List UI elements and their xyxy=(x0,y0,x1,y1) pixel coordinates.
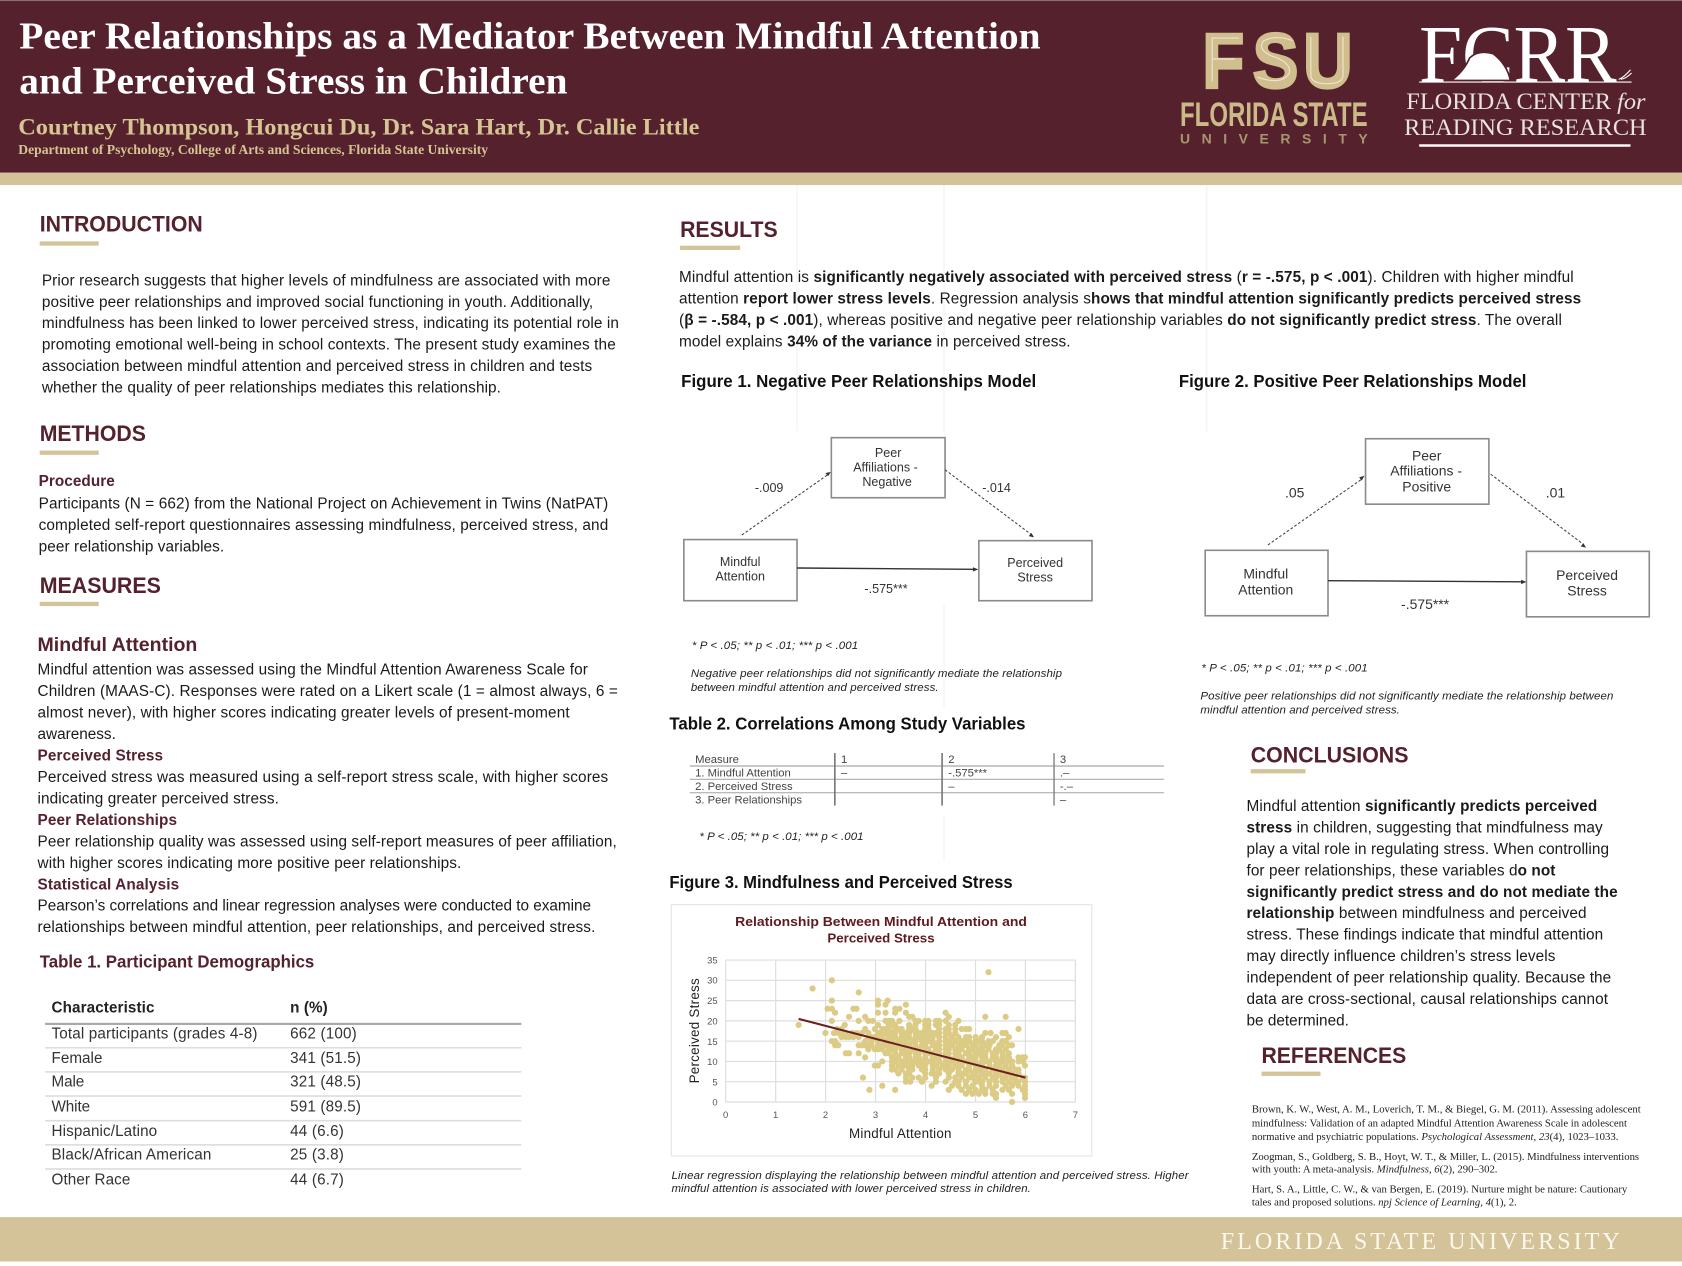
y axis ticks xyxy=(707,954,718,1107)
table 1: participant demographics: Other Race xyxy=(51,1171,130,1188)
box: peer affiliations positive: Affiliations - xyxy=(1390,463,1462,479)
box: mindful attention xyxy=(684,540,797,601)
x axis ticks: 2 xyxy=(823,1109,828,1120)
mindful attention text: almost never), with higher scores indicating greater levels of present-moment xyxy=(38,705,570,722)
table 2: correlations: -.– xyxy=(1060,781,1074,793)
logo: FCRR: FCRR xyxy=(1419,9,1617,100)
logo: FCRR: FLORIDA CENTER for xyxy=(1406,89,1646,115)
introduction text: mindfulness has been linked to lower perceived stress, indicating its potential role in xyxy=(42,315,619,332)
figure 3 caption: mindful attention is associated with lower perceived stress in children. xyxy=(672,1183,1031,1195)
figure 1 caption: between mindful attention and perceived stress. xyxy=(691,682,939,694)
logo: FSU: FLORIDA STATE xyxy=(1180,96,1368,134)
table 1: participant demographics: Hispanic/Latino xyxy=(51,1123,157,1140)
path labels: -.575*** xyxy=(1401,596,1450,612)
table 2: correlations: – xyxy=(841,768,848,780)
table 2: correlations: 3 xyxy=(1060,754,1066,766)
subheading: mindful attention: Mindful Attention xyxy=(38,635,197,656)
reference list: normative and psychiatric populations. Psychological Assessment, 23(4), 1023–1033. xyxy=(1252,1131,1618,1143)
box: mindful attention: Mindful xyxy=(1243,566,1288,582)
table 1: participant demographics: Male xyxy=(51,1074,84,1091)
figure 3 heading: Figure 3. Mindfulness and Perceived Stress xyxy=(669,872,1013,892)
y axis ticks: 35 xyxy=(707,954,718,965)
figure 3 caption xyxy=(672,1170,1190,1195)
table 2: correlations xyxy=(690,753,1164,806)
arrow: mindful to stress xyxy=(1328,580,1526,584)
table 1: participant demographics: 341 (51.5) xyxy=(290,1050,361,1067)
chart title xyxy=(735,914,1027,945)
figure 1 caption xyxy=(691,668,1063,694)
conclusions text: may directly influence children’s stress levels xyxy=(1246,948,1556,965)
figure 3 caption: Linear regression displaying the relationship between mindful attention and perceived stress. Higher xyxy=(672,1170,1190,1182)
box: mindful attention: Attention xyxy=(1238,581,1293,597)
reference list: tales and proposed solutions. npj Science of Learning, 4(1), 2. xyxy=(1252,1197,1517,1209)
table 1: participant demographics: 44 (6.6) xyxy=(290,1123,344,1140)
figure 2: positive peer relationships model xyxy=(1179,371,1649,716)
box: perceived stress xyxy=(979,541,1092,601)
reference list: Zoogman, S., Goldberg, S. B., Hoyt, W. T., & Miller, L. (2015). Mindfulness interventions xyxy=(1252,1151,1639,1163)
table 2: correlations: 2 xyxy=(948,754,955,766)
x axis ticks xyxy=(723,1109,1078,1120)
mindful attention text: Mindful attention was assessed using the Mindful Attention Awareness Scale for xyxy=(38,662,588,679)
table 2: correlations: 2. Perceived Stress xyxy=(695,781,793,793)
box: perceived stress: Perceived xyxy=(1556,567,1618,583)
y axis ticks: 5 xyxy=(712,1077,718,1088)
perceived stress text: Perceived stress was measured using a self-report stress scale, with higher scores xyxy=(38,769,609,786)
title: Peer Relationships as a Mediator Between Mindful Attention xyxy=(19,16,1041,57)
panel: references xyxy=(1252,1043,1641,1209)
table 2 significance note: * P < .05; ** p < .01; *** p < .001 xyxy=(699,831,864,843)
table 1: participant demographics: n (%) xyxy=(290,1000,328,1017)
box: peer affiliations positive: Peer xyxy=(1412,448,1442,464)
scatter points xyxy=(799,972,1025,1102)
conclusions text: significantly predict stress and do not mediate the xyxy=(1246,884,1618,901)
x axis ticks: 5 xyxy=(973,1109,978,1120)
introduction text: whether the quality of peer relationships mediates this relationship. xyxy=(41,380,501,397)
x axis ticks: 6 xyxy=(1023,1109,1028,1120)
results text: model explains 34% of the variance in perceived stress. xyxy=(679,333,1071,350)
table 2: correlations: – xyxy=(1060,794,1067,806)
table 1: participant demographics: 591 (89.5) xyxy=(290,1098,361,1115)
table 2: correlations: .– xyxy=(1060,768,1070,780)
procedure text: completed self-report questionnaires assessing mindfulness, perceived stress, and xyxy=(39,517,608,534)
path labels xyxy=(755,481,1011,596)
path labels: -.009 xyxy=(755,481,783,495)
statistical analysis text: relationships between mindful attention, peer relationships, and perceived stress. xyxy=(38,919,595,936)
panel: measures xyxy=(37,573,618,936)
panel: results xyxy=(679,217,1581,350)
table 1: participant demographics: 662 (100) xyxy=(290,1025,357,1042)
box: mindful attention: Attention xyxy=(715,569,765,583)
box: peer affiliations positive: Positive xyxy=(1402,478,1451,494)
introduction text: Prior research suggests that higher levels of mindfulness are associated with more xyxy=(42,272,610,289)
table 1: participant demographics: Characteristic xyxy=(51,1000,155,1017)
table 1: participant demographics: 321 (48.5) xyxy=(290,1074,361,1091)
box: peer affiliations negative xyxy=(831,438,945,498)
subheading: perceived stress: Perceived Stress xyxy=(38,748,163,765)
figure 3: scatter chart xyxy=(671,905,1092,1156)
panel: methods xyxy=(39,421,608,555)
panel: introduction xyxy=(40,212,619,397)
table 1: participant demographics: Black/African American xyxy=(51,1147,211,1164)
chart title: Perceived Stress xyxy=(827,930,935,945)
title: and Perceived Stress in Children xyxy=(19,61,568,102)
results text: Mindful attention is significantly negatively associated with perceived stress (r = -.575, p < .001). Children with higher mindful xyxy=(679,269,1574,286)
table 1: participant demographics: Female xyxy=(51,1050,102,1067)
box: perceived stress: Stress xyxy=(1017,570,1053,584)
introduction text: positive peer relationships and improved social functioning in youth. Additionally, xyxy=(42,294,593,311)
authors: Courtney Thompson, Hongcui Du, Dr. Sara Hart, Dr. Callie Little xyxy=(18,115,699,141)
x axis ticks: 1 xyxy=(773,1109,778,1120)
results text: attention report lower stress levels. Regression analysis shows that mindful attention significantly predicts perceived stress xyxy=(679,291,1581,308)
panel: conclusions xyxy=(1246,743,1618,1030)
arrow: peer to stress xyxy=(1491,474,1586,548)
conclusions text: play a vital role in regulating stress. When controlling xyxy=(1246,841,1609,858)
path labels: .05 xyxy=(1285,485,1305,501)
y axis ticks: 20 xyxy=(707,1015,718,1026)
arrow: mindful to peer xyxy=(742,472,831,535)
table 1: participant demographics: 25 (3.8) xyxy=(290,1147,344,1164)
box: peer affiliations positive xyxy=(1366,439,1489,504)
figure 1 heading: Figure 1. Negative Peer Relationships Model xyxy=(681,371,1036,391)
statistical analysis text: Pearson’s correlations and linear regression analyses were conducted to examine xyxy=(38,898,591,915)
perceived stress text: indicating greater perceived stress. xyxy=(38,790,279,807)
box: peer affiliations negative: Negative xyxy=(862,475,912,489)
y axis ticks: 15 xyxy=(707,1036,718,1047)
path labels: -.575*** xyxy=(864,582,908,596)
conclusions text: for peer relationships, these variables do not xyxy=(1246,862,1555,879)
y axis ticks: 0 xyxy=(712,1096,718,1107)
arrow: mindful to peer xyxy=(1268,476,1364,545)
x axis ticks: 7 xyxy=(1073,1109,1078,1120)
heading: introduction: INTRODUCTION xyxy=(40,212,203,237)
peer relationships text: with higher scores indicating more positive peer relationships. xyxy=(37,855,461,872)
statistical analysis text xyxy=(38,898,595,936)
figure 1 caption: Negative peer relationships did not significantly mediate the relationship xyxy=(691,668,1063,680)
arrow: peer to stress xyxy=(945,470,1034,537)
mindful attention text: awareness. xyxy=(38,726,116,743)
heading: references: REFERENCES xyxy=(1261,1043,1406,1068)
mindful attention text: Children (MAAS-C). Responses were rated on a Likert scale (1 = almost always, 6 = xyxy=(38,683,618,700)
footer wordmark: FLORIDA STATE UNIVERSITY xyxy=(1221,1228,1620,1255)
reference list: Hart, S. A., Little, C. W., & van Bergen, E. (2019). Nurture might be nature: Cautionary xyxy=(1252,1184,1628,1196)
trend line xyxy=(799,1019,1026,1078)
department: Department of Psychology, College of Arts and Sciences, Florida State University xyxy=(18,142,488,157)
reference list xyxy=(1252,1104,1641,1209)
path labels: .01 xyxy=(1546,485,1565,501)
logo: FCRR xyxy=(1404,9,1647,147)
figure 2 caption xyxy=(1200,690,1613,716)
reference list: mindfulness: Validation of an adapted Mindful Attention Awareness Scale in adolescent xyxy=(1252,1118,1627,1130)
procedure text: peer relationship variables. xyxy=(39,538,224,555)
introduction text: association between mindful attention and perceived stress in children and tests xyxy=(42,358,592,375)
table 1: participant demographics: 44 (6.7) xyxy=(290,1171,344,1188)
path labels: -.014 xyxy=(982,481,1011,495)
y axis title: Perceived Stress xyxy=(687,978,702,1083)
chart title: Relationship Between Mindful Attention and xyxy=(735,914,1027,929)
table 1: participant demographics: White xyxy=(51,1098,90,1115)
heading: methods: METHODS xyxy=(40,421,146,446)
table 1: participant demographics: Total participants (grades 4-8) xyxy=(51,1025,257,1042)
path labels xyxy=(1285,485,1565,612)
box: mindful attention: Mindful xyxy=(720,555,760,569)
header banner xyxy=(0,0,1682,185)
results text xyxy=(679,269,1581,350)
y axis ticks: 25 xyxy=(707,995,718,1006)
peer relationships text xyxy=(37,833,617,872)
table 2: correlations: 3. Peer Relationships xyxy=(695,794,802,806)
significance note: * P < .05; ** p < .01; *** p < .001 xyxy=(1201,663,1368,675)
box: perceived stress: Stress xyxy=(1567,582,1607,598)
conclusions text xyxy=(1246,798,1618,1030)
introduction text: promoting emotional well-being in school contexts. The present study examines the xyxy=(42,337,616,354)
subheading: peer relationships: Peer Relationships xyxy=(38,812,177,829)
conclusions text: be determined. xyxy=(1246,1013,1349,1030)
logo: FSU: UNIVERSITY xyxy=(1180,130,1368,146)
x axis ticks: 3 xyxy=(873,1109,878,1120)
table 2: correlations: Measure xyxy=(695,754,739,766)
x axis title: Mindful Attention xyxy=(849,1126,951,1141)
heading: conclusions: CONCLUSIONS xyxy=(1251,743,1408,768)
conclusions text: stress. These findings indicate that mindful attention xyxy=(1246,927,1603,944)
table 2: correlations: -.575*** xyxy=(948,768,988,780)
subheading: statistical analysis: Statistical Analysis xyxy=(38,876,179,893)
x axis ticks: 4 xyxy=(923,1109,928,1120)
x axis ticks: 0 xyxy=(723,1109,728,1120)
table 2: correlations: 1 xyxy=(841,754,847,766)
box: mindful attention xyxy=(1205,550,1328,616)
box: perceived stress xyxy=(1526,551,1649,617)
table 1: participant demographics xyxy=(45,1000,521,1188)
box: perceived stress: Perceived xyxy=(1007,556,1063,570)
y axis ticks: 30 xyxy=(707,975,718,986)
table 1 heading: Table 1. Participant Demographics xyxy=(40,952,314,972)
reference list: with youth: A meta-analysis. Mindfulness, 6(2), 290–302. xyxy=(1252,1163,1497,1175)
footer band xyxy=(0,1217,1682,1261)
logo: FCRR: READING RESEARCH xyxy=(1404,115,1647,141)
logo: FSU: FSU xyxy=(1202,18,1352,104)
heading: results: RESULTS xyxy=(680,217,778,242)
subheading: procedure: Procedure xyxy=(39,473,115,490)
perceived stress text xyxy=(38,769,609,807)
table 2: correlations: – xyxy=(948,781,955,793)
conclusions text: Mindful attention significantly predicts perceived xyxy=(1246,798,1597,815)
mindful attention text xyxy=(38,662,618,743)
table 2: correlations: 1. Mindful Attention xyxy=(695,768,791,780)
conclusions text: independent of peer relationship quality. Because the xyxy=(1246,970,1611,987)
conclusions text: relationship between mindfulness and perceived xyxy=(1246,905,1587,922)
peer relationships text: Peer relationship quality was assessed using self-report measures of peer affiliation, xyxy=(38,833,617,850)
figure 2 heading: Figure 2. Positive Peer Relationships Model xyxy=(1179,371,1526,391)
conclusions text: stress in children, suggesting that mindfulness may xyxy=(1246,819,1603,836)
procedure text: Participants (N = 662) from the National Project on Achievement in Twins (NatPAT) xyxy=(39,495,608,512)
reference list: Brown, K. W., West, A. M., Loverich, T. M., & Biegel, G. M. (2011). Assessing adolescent xyxy=(1252,1104,1641,1116)
procedure text xyxy=(39,495,608,555)
heading: measures: MEASURES xyxy=(40,573,161,598)
arrow: mindful to stress xyxy=(797,567,978,572)
figure 2 caption: mindful attention and perceived stress. xyxy=(1200,704,1400,716)
title xyxy=(19,16,1041,102)
significance note: * P < .05; ** p < .01; *** p < .001 xyxy=(692,640,858,652)
table 2 heading: Table 2. Correlations Among Study Variables xyxy=(669,713,1026,733)
figure 1: negative peer relationships model xyxy=(681,371,1092,694)
figure 2 caption: Positive peer relationships did not significantly mediate the relationship between xyxy=(1200,690,1613,702)
results text: (β = -.584, p < .001), whereas positive and negative peer relationship variables do not significantly predict stress. The overall xyxy=(679,312,1562,329)
y axis ticks: 10 xyxy=(707,1056,718,1067)
box: peer affiliations negative: Affiliations - xyxy=(853,460,918,474)
box: peer affiliations negative: Peer xyxy=(875,446,901,460)
logo: FSU xyxy=(1180,18,1368,146)
introduction text xyxy=(41,272,619,397)
conclusions text: data are cross-sectional, causal relationships cannot xyxy=(1246,991,1609,1008)
